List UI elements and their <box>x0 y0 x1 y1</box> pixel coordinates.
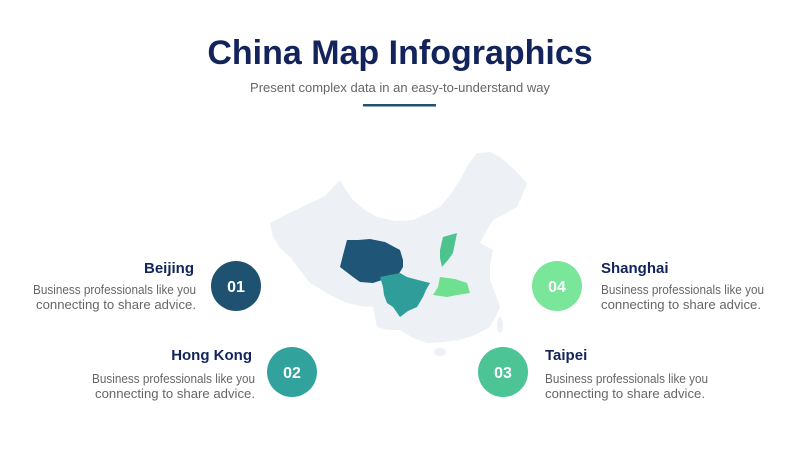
item 02: Hong Kong: connecting to share advice. <box>95 387 255 401</box>
item 01: Beijing: Beijing <box>144 260 194 277</box>
item 02: Hong Kong <box>92 347 317 401</box>
item 02: Hong Kong: Business professionals like you <box>92 372 255 386</box>
item 01: Beijing <box>33 260 261 312</box>
item 01: Beijing: Business professionals like you <box>33 283 196 297</box>
item 02: Hong Kong: Hong Kong <box>171 347 252 364</box>
item 04: Shanghai <box>532 260 764 312</box>
region: Sichuan <box>380 273 430 317</box>
item 03: Taipei <box>478 347 708 401</box>
item 04: Shanghai: connecting to share advice. <box>601 298 761 312</box>
region: Hubei <box>433 277 470 297</box>
region: Shaanxi <box>440 233 457 267</box>
item 03: Taipei: Business professionals like you <box>545 372 708 386</box>
item 03: Taipei: 03 <box>494 365 512 382</box>
item 03: Taipei: connecting to share advice. <box>545 387 705 401</box>
underline accent <box>363 104 436 106</box>
item 04: Shanghai: Business professionals like you <box>601 283 764 297</box>
item 01: Beijing: 01 <box>227 279 245 296</box>
subtitle: Present complex data in an easy-to-understand way <box>250 80 550 95</box>
item 04: Shanghai: Shanghai <box>601 260 669 277</box>
region: Qinghai <box>340 239 403 283</box>
map: China <box>270 152 527 356</box>
title: China Map Infographics <box>207 34 593 72</box>
item 02: Hong Kong: 02 <box>283 365 301 382</box>
item 03: Taipei: Taipei <box>545 347 587 364</box>
item 04: Shanghai: 04 <box>548 279 566 296</box>
item 01: Beijing: connecting to share advice. <box>36 298 196 312</box>
